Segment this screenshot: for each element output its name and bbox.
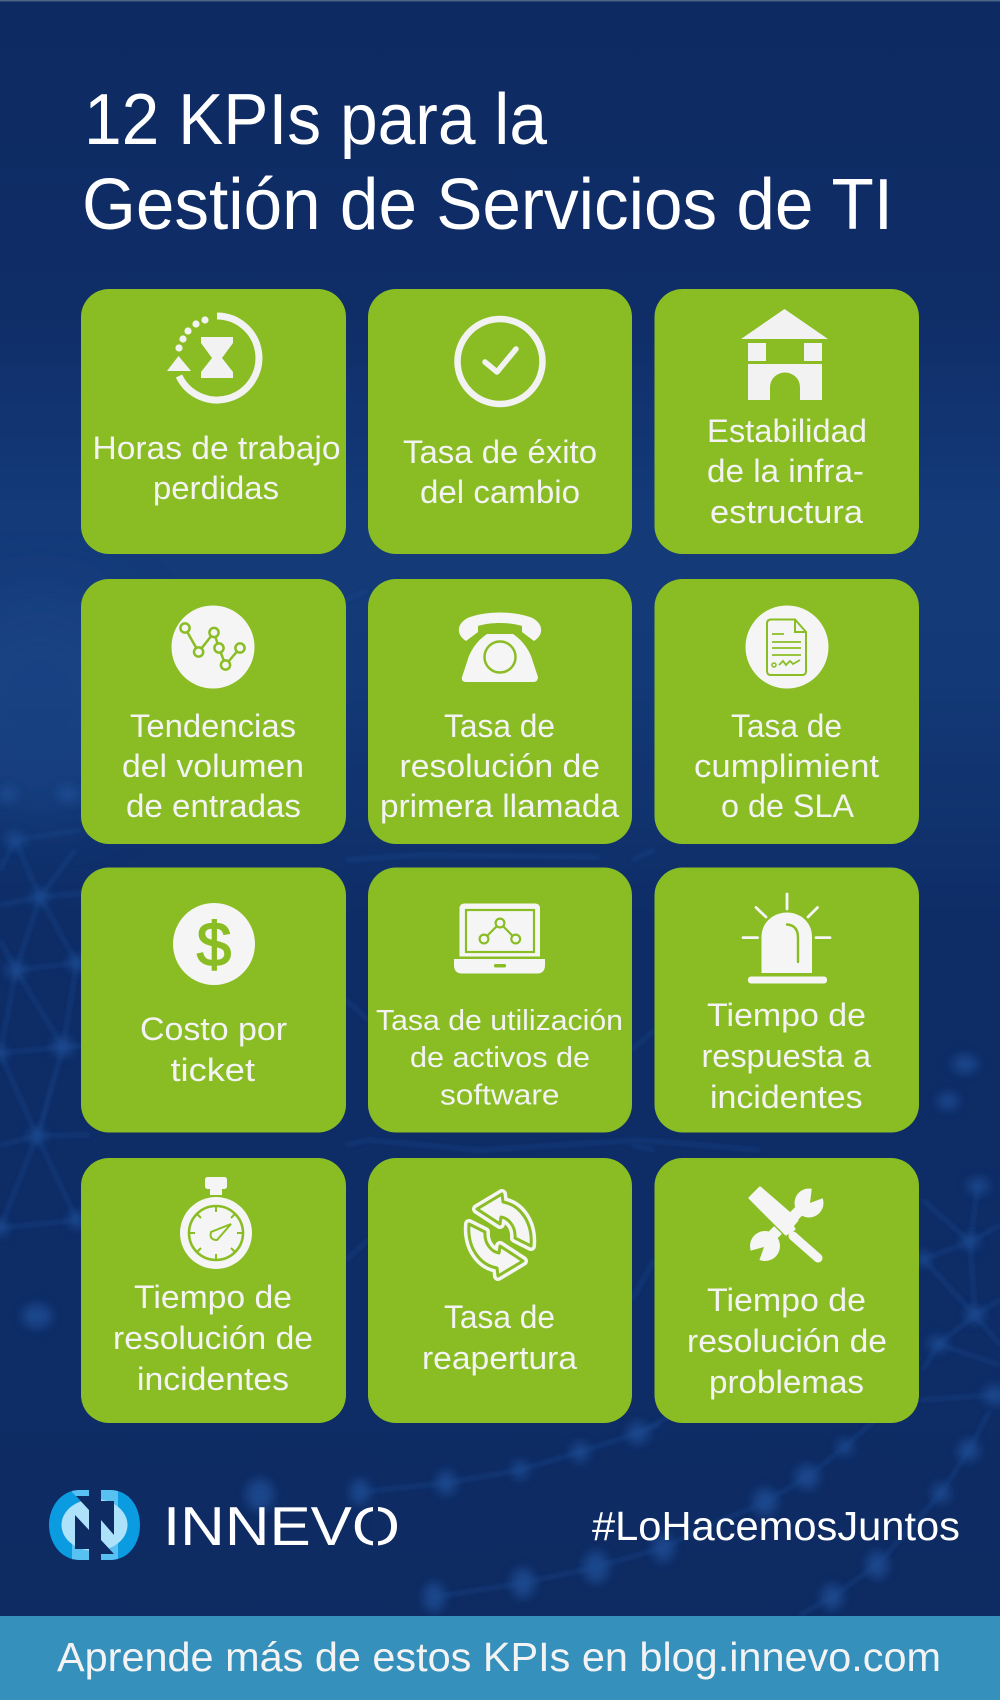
label: software	[440, 1080, 560, 1112]
icon: dollar circle: $	[197, 911, 231, 980]
label: respuesta a	[702, 1038, 871, 1074]
label	[376, 1005, 623, 1112]
label: de activos de	[410, 1042, 590, 1074]
label: Horas de trabajo	[92, 430, 340, 466]
label: Estabilidad	[707, 413, 867, 449]
label	[707, 413, 867, 530]
label: Tiempo de	[134, 1279, 292, 1315]
label: resolución de	[400, 748, 600, 784]
label: Tasa de éxito	[403, 434, 597, 470]
label: primera llamada	[380, 788, 619, 824]
panel: Costo por ticket	[81, 868, 346, 1132]
label: reapertura	[422, 1340, 577, 1376]
icon: building	[741, 309, 828, 400]
icon: trend chart circle	[172, 606, 254, 688]
icon: document circle	[746, 606, 828, 688]
label	[380, 708, 619, 824]
label: Tiempo de	[707, 997, 866, 1033]
title: Gestión de Servicios de TI	[82, 165, 893, 245]
label: de entradas	[126, 788, 301, 824]
label: del volumen	[122, 748, 304, 784]
label	[140, 1011, 287, 1088]
label: Tiempo de	[707, 1282, 866, 1318]
label	[92, 430, 340, 506]
label: cumplimient	[694, 748, 879, 784]
label: Tasa de	[444, 708, 555, 744]
label: perdidas	[153, 470, 279, 506]
panel: Tiempo de resolución de problemas	[654, 1158, 919, 1423]
label: Tendencias	[130, 708, 296, 744]
label	[113, 1279, 313, 1397]
footer bar	[0, 1616, 1000, 1700]
label: Tasa de	[444, 1299, 555, 1335]
label: Tasa de utilización	[376, 1005, 623, 1037]
label: estructura	[710, 494, 863, 530]
logo: INNEVO	[49, 1490, 400, 1560]
icon: alarm beacon	[743, 894, 830, 984]
panel: Tasa de éxito del cambio	[368, 289, 632, 554]
icon: telephone	[459, 612, 541, 682]
wordmark: INNEVO	[163, 1495, 400, 1557]
label: Costo por	[140, 1011, 287, 1047]
label	[694, 708, 879, 824]
panel: Tasa de cumplimiento de SLA	[654, 579, 919, 844]
label	[403, 434, 597, 510]
label	[687, 1282, 887, 1400]
label: resolución de	[113, 1320, 313, 1356]
label	[702, 997, 871, 1115]
label: del cambio	[420, 474, 580, 510]
label: incidentes	[710, 1079, 862, 1115]
panel: Tasa de resolución de primera llamada	[368, 579, 632, 844]
label: problemas	[709, 1364, 864, 1400]
footer text: Aprende más de estos KPIs en blog.innevo.com	[57, 1634, 941, 1680]
title: 12 KPIs para la	[84, 80, 548, 160]
label	[122, 708, 304, 824]
panel: Tiempo de respuesta a incidentes	[654, 868, 919, 1132]
icon: check circle	[458, 319, 542, 404]
panel: Tasa de utilización de activos de software	[368, 868, 632, 1132]
icon: hourglass clock	[167, 316, 259, 400]
icon: logo mark	[49, 1490, 140, 1560]
icon: tools	[746, 1187, 826, 1264]
panel: Tasa de reapertura	[368, 1158, 632, 1423]
label: de la infra-	[707, 453, 864, 489]
icon: dollar circle	[173, 903, 255, 985]
label: ticket	[170, 1052, 255, 1088]
label: Tasa de	[731, 708, 842, 744]
icon: refresh arrows	[469, 1194, 531, 1276]
panel: Tiempo de resolución de incidentes	[81, 1158, 346, 1423]
panel: Horas de trabajo perdidas	[81, 289, 346, 554]
label: resolución de	[687, 1323, 887, 1359]
label: o de SLA	[721, 788, 855, 824]
panel: Estabilidad de la infraestructura	[654, 289, 919, 554]
title	[82, 80, 893, 245]
label	[422, 1299, 577, 1376]
icon: laptop	[454, 904, 545, 974]
hashtag: #LoHacemosJuntos	[592, 1503, 960, 1549]
icon: stopwatch	[180, 1177, 252, 1269]
label: incidentes	[137, 1361, 289, 1397]
panel: Tendencias del volumen de entradas	[81, 579, 346, 844]
